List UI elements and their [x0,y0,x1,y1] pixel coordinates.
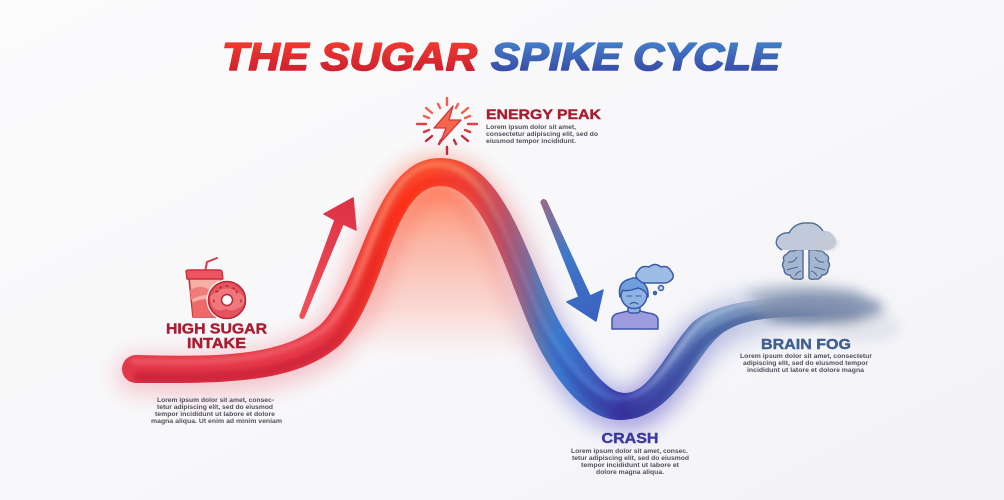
text: crash description: dolore magna aliqua. [596,469,664,476]
heading: high sugar intake: INTAKE [187,336,246,352]
heading: high sugar intake [166,322,268,352]
text: high sugar description: tempor incididunt ut labore et dolore [155,411,275,418]
text: crash description: Lorem ipsum dolor sit amet, consec. [571,448,688,455]
arrow: rising [300,198,356,318]
text: crash description: tetur adipiscing elit, sed do eiusmod [572,455,689,462]
curve glow and inner hump shading [136,177,810,411]
heading: crash: CRASH [602,431,658,447]
text: energy peak description [486,124,598,145]
text: high sugar description: Lorem ipsum dolor sit amet, consec- [157,397,274,404]
text: high sugar description: tetur adipiscing elit, sed do eiusmod [157,404,273,411]
text: crash description: tempor incididunt ut labore et [581,462,680,469]
text: energy peak description: eiusmod tempor incididunt. [486,138,576,145]
arrow: falling [541,200,603,321]
text: high sugar description [151,397,282,425]
title: SPIKE CYCLE [491,36,781,79]
text: brain fog description: Lorem ipsum dolor sit amet, consectetur [740,353,872,360]
icon: energy burst [417,98,477,154]
icon: brain under cloud [776,223,837,279]
text: brain fog description: adipiscing elit, sed do eiusmod tempor [743,360,868,367]
heading: energy peak: ENERGY PEAK [486,106,601,122]
text: brain fog description: incididunt ut latore et dolore magna [747,367,864,374]
title [222,36,781,79]
sugar spike curve [122,158,835,420]
text: high sugar description: magna aliqua. Ut enim ad minim veniam [151,418,282,425]
title: THE SUGAR [222,36,477,79]
heading: high sugar intake: HIGH SUGAR [166,322,268,338]
text: crash description [571,448,689,476]
brain fog cloud [745,285,900,343]
icon: drink and donut [186,258,248,320]
text: energy peak description: Lorem ipsum dolor sit amet, [486,124,576,131]
text: energy peak description: consectetur adipiscing elit, sed do [486,131,598,138]
text: brain fog description [740,353,872,374]
heading: brain fog: BRAIN FOG [761,336,851,353]
icon: tired person with thought cloud [612,264,673,329]
